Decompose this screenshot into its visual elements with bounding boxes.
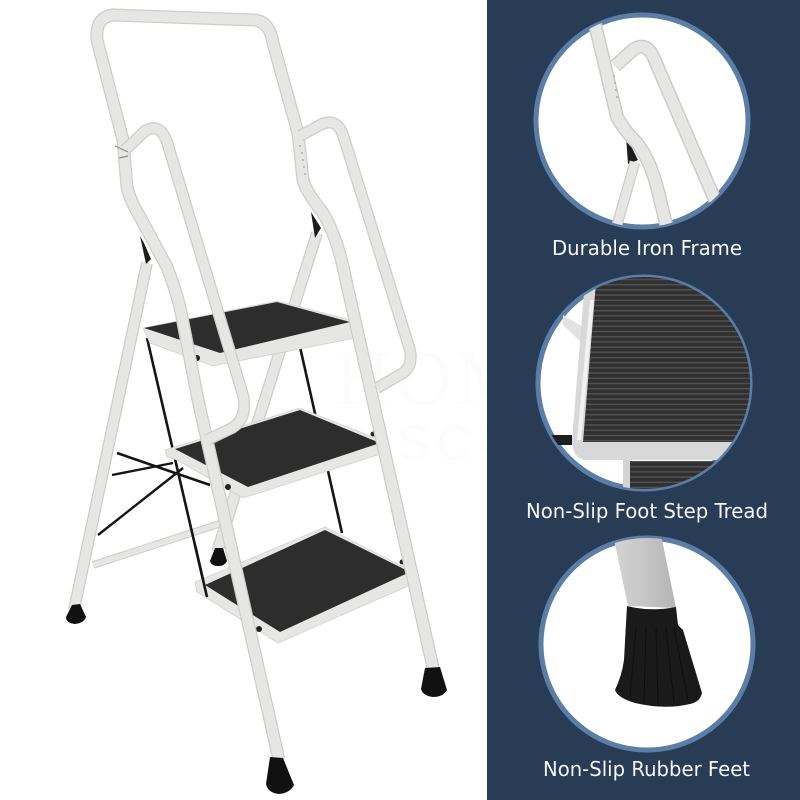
watermark: HOME bbox=[335, 334, 581, 421]
frame clamp bbox=[115, 146, 128, 158]
bottom step bbox=[195, 527, 415, 643]
step ladder bbox=[66, 15, 447, 794]
panel: non-slip foot step tread bbox=[526, 270, 768, 523]
strap ends over bottom step bbox=[195, 545, 207, 597]
rear legs and crossbar bbox=[74, 233, 317, 610]
black folding straps bbox=[98, 338, 342, 597]
label: non-slip rubber feet: Non-Slip Rubber Feet bbox=[543, 757, 750, 781]
panel: durable iron frame bbox=[536, 15, 748, 260]
middle step bbox=[165, 408, 387, 498]
label: non-slip foot step tread: Non-Slip Foot Step Tread bbox=[526, 499, 768, 523]
top step bbox=[143, 301, 360, 366]
height adjust holes bbox=[299, 145, 306, 175]
watermark bbox=[335, 334, 644, 471]
panel: navy sidebar bbox=[487, 0, 800, 800]
left handrail bbox=[125, 128, 244, 440]
hinge brackets bbox=[140, 212, 321, 264]
circle photo: tread detail bbox=[538, 270, 760, 495]
label: durable iron frame: Durable Iron Frame bbox=[552, 236, 742, 260]
watermark: DISCOUNT bbox=[335, 415, 644, 471]
panel: non-slip rubber feet bbox=[541, 530, 753, 781]
rubber feet bbox=[66, 548, 447, 794]
main frame: front legs and top bar bbox=[97, 15, 434, 760]
right handrail bbox=[300, 122, 411, 388]
circle photo: frame detail bbox=[536, 15, 748, 232]
step bolts bbox=[194, 355, 404, 632]
circle photo: rubber foot detail bbox=[541, 530, 753, 750]
